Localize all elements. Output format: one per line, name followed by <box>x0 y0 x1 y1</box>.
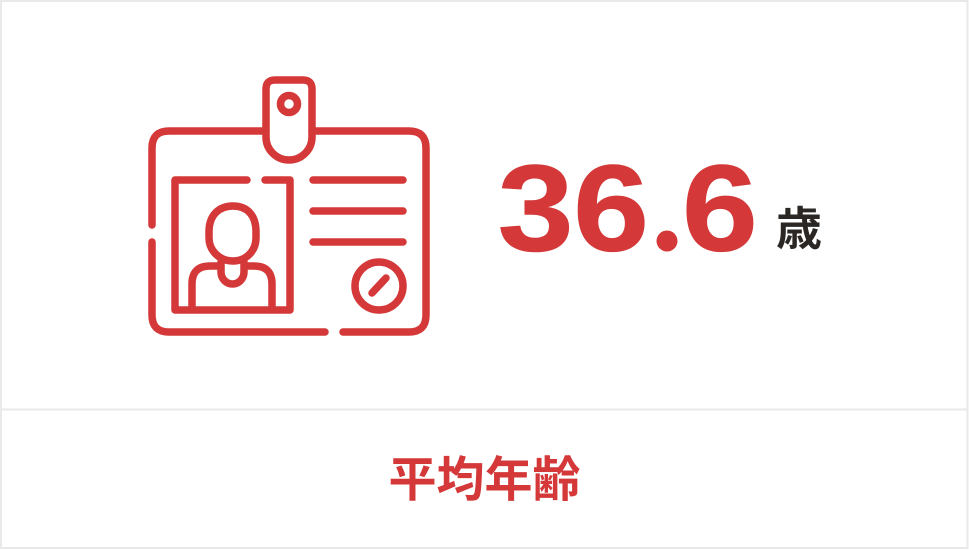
person collar <box>221 262 244 284</box>
badge clip <box>266 80 312 160</box>
person head <box>209 206 256 261</box>
badge card outline <box>152 131 426 332</box>
photo frame <box>175 180 290 310</box>
text lines <box>313 180 403 242</box>
value: 36.6: 36.6 <box>498 139 758 277</box>
clip hole <box>280 96 298 112</box>
unit: 歳: 歳 <box>776 203 822 255</box>
label: 平均年齢: 平均年齢 <box>388 454 581 507</box>
person shoulders <box>192 266 272 309</box>
icon: ID badge <box>152 80 426 332</box>
stamp <box>355 262 403 310</box>
